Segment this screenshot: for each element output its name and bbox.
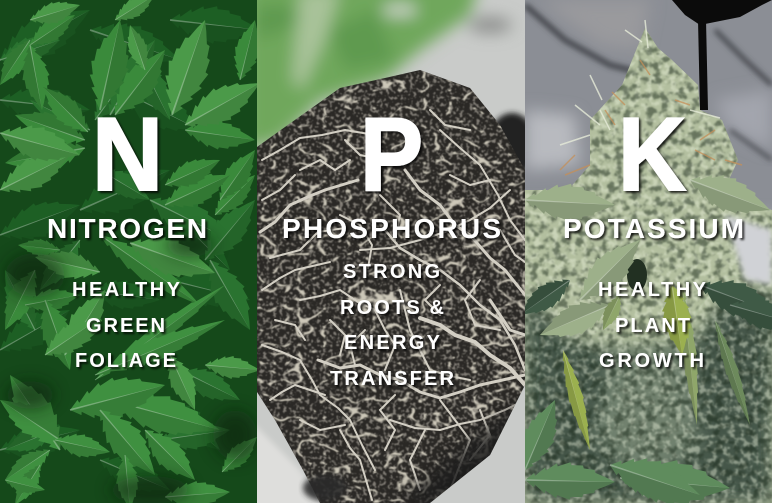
panel: phosphorus <box>245 0 540 503</box>
photo: flowering bud against reflective tent <box>510 0 772 503</box>
text: healthy plant growth: HEALTHY <box>598 279 707 301</box>
text: healthy plant growth <box>598 279 707 372</box>
text: healthy green foliage: HEALTHY <box>72 279 181 301</box>
heading: nitrogen: NITROGEN <box>47 213 207 244</box>
text: healthy plant growth: GROWTH <box>599 350 704 372</box>
text: healthy green foliage <box>72 279 181 372</box>
text: strong roots and energy transfer: ROOTS & <box>340 297 444 319</box>
roots <box>260 110 525 500</box>
text: healthy green foliage: FOLIAGE <box>75 350 176 372</box>
letter P: P <box>360 97 423 213</box>
text: strong roots and energy transfer <box>330 261 455 390</box>
text: strong roots and energy transfer: STRONG <box>343 261 440 283</box>
bud body <box>525 20 772 503</box>
letter K: K <box>618 97 686 213</box>
panel: nitrogen <box>0 0 269 503</box>
heading: potassium: POTASSIUM <box>563 213 744 244</box>
heading: phosphorus: PHOSPHORUS <box>282 213 501 244</box>
icon: black strap <box>672 0 772 110</box>
letter N: N <box>92 97 163 213</box>
text: strong roots and energy transfer: ENERGY <box>344 332 441 354</box>
text: healthy green foliage: GREEN <box>86 315 165 337</box>
panel: potassium <box>510 0 772 503</box>
photo: root ball <box>245 0 540 503</box>
photo: cannabis foliage <box>0 0 269 503</box>
text: strong roots and energy transfer: TRANSFER <box>330 368 455 390</box>
text: healthy plant growth: PLANT <box>615 315 690 337</box>
